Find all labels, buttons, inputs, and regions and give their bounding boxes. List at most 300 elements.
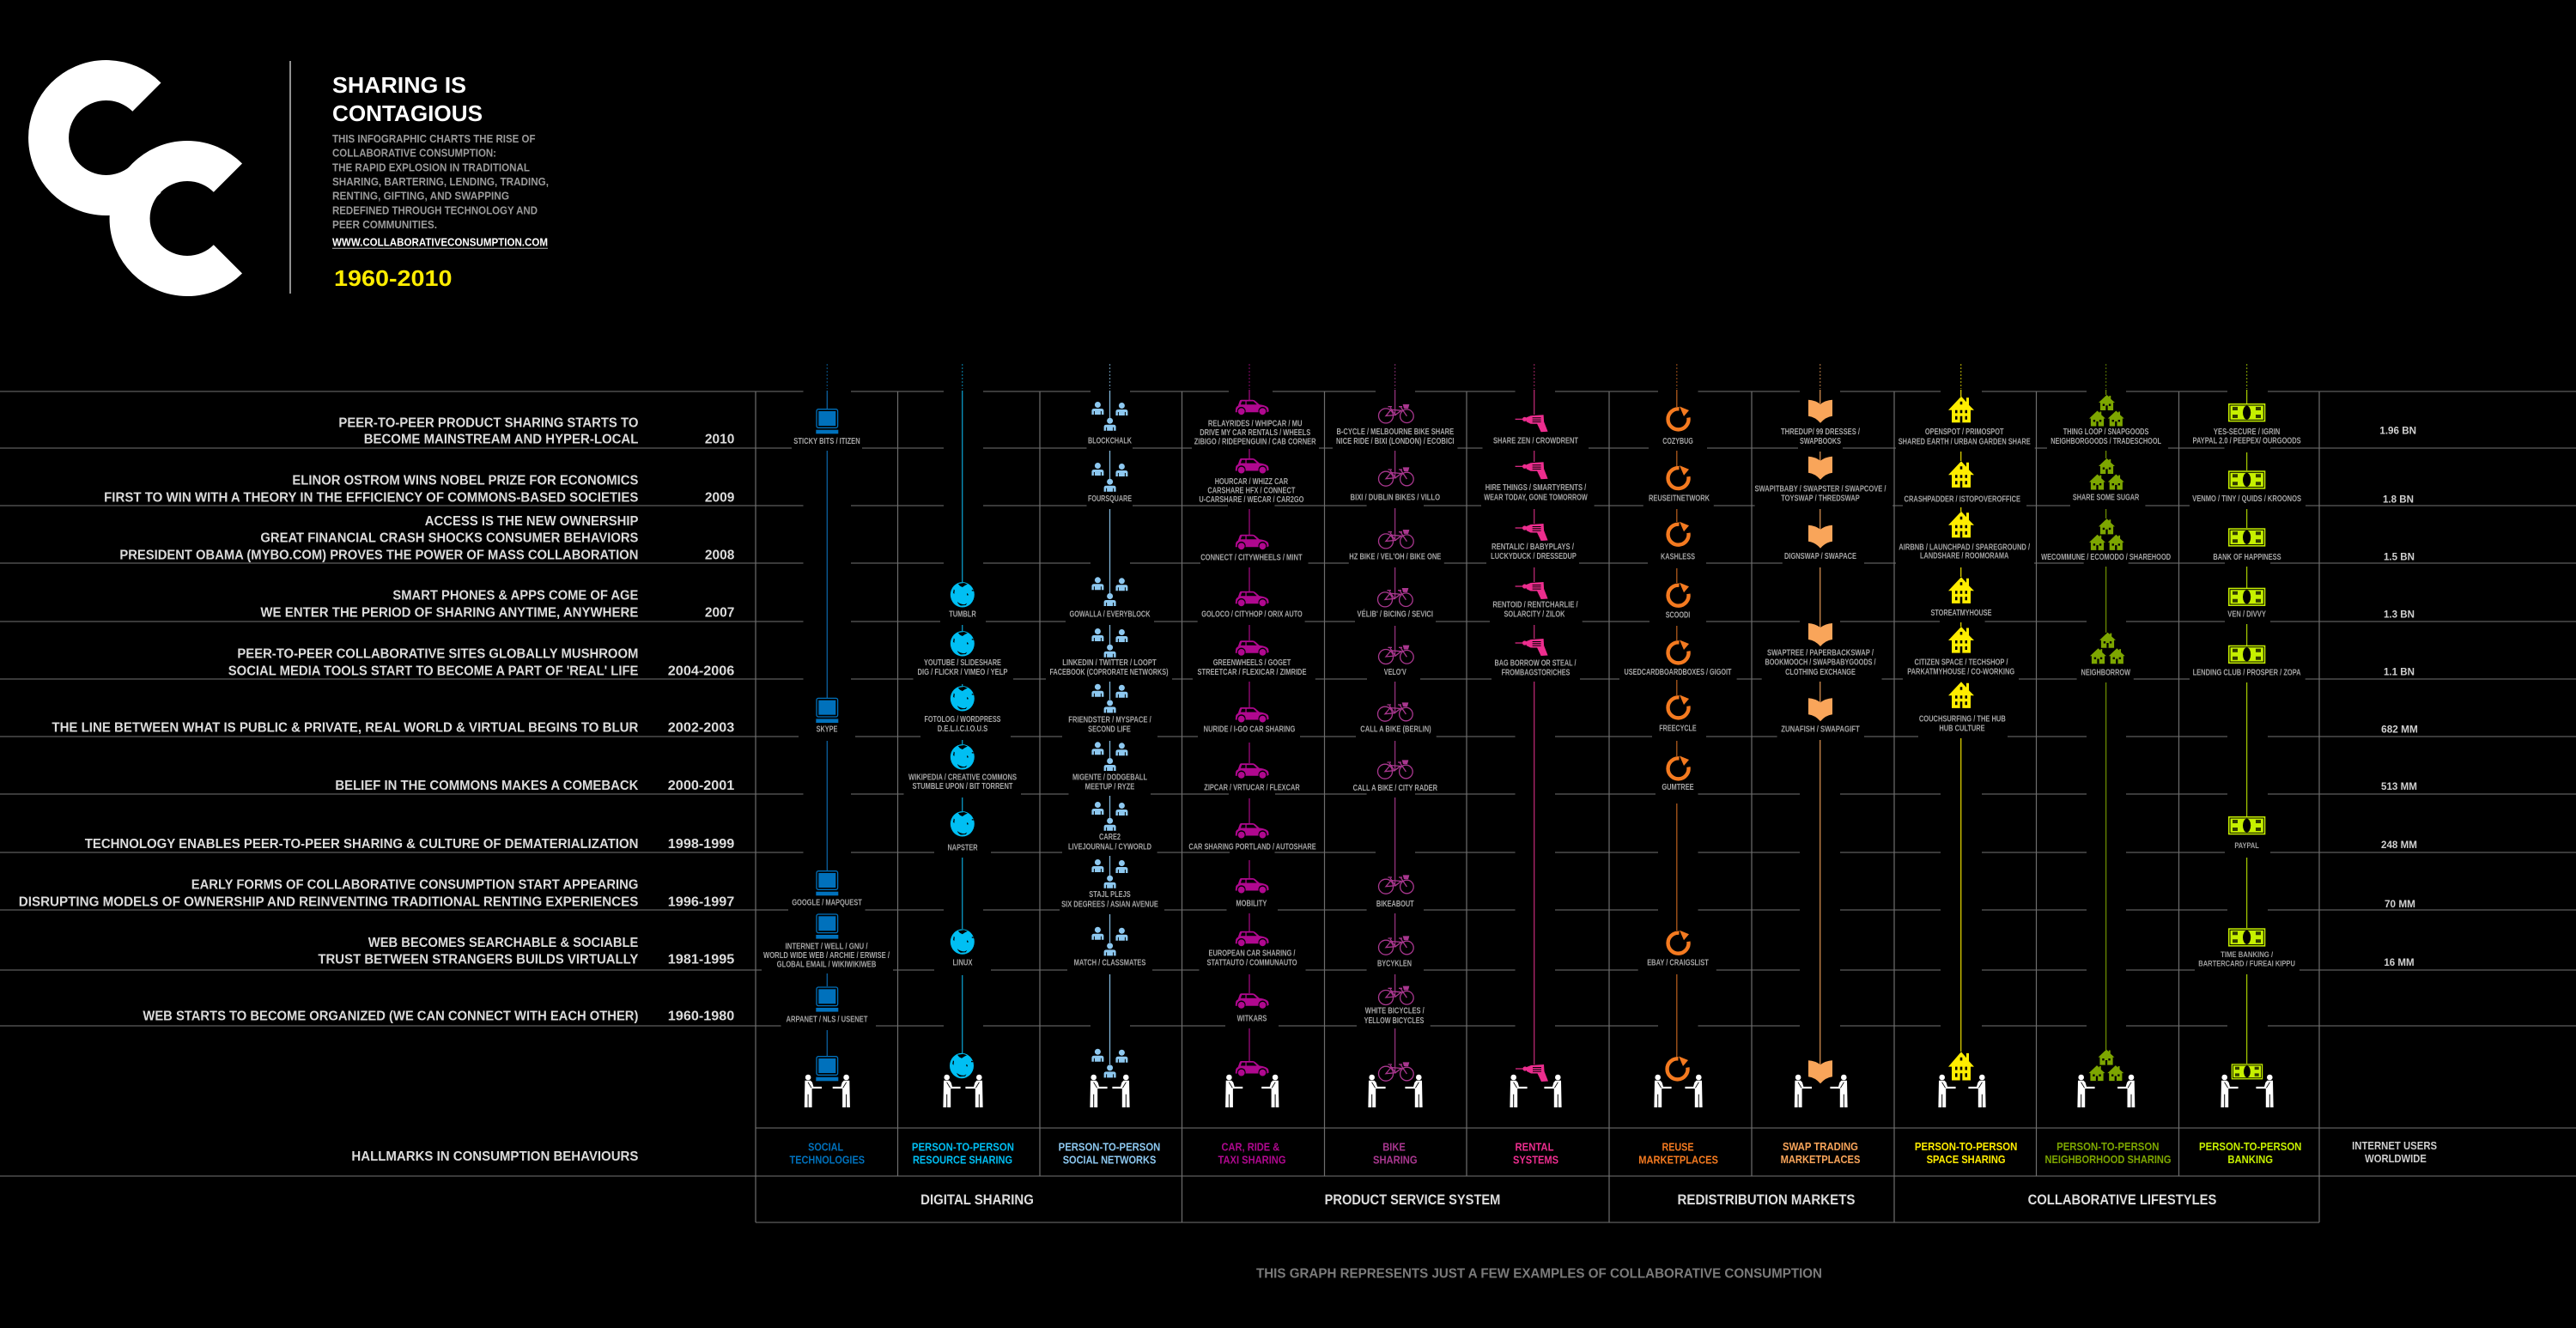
icon: car shared by people bbox=[1225, 1061, 1279, 1107]
group: digital sharing: DIGITAL SHARING bbox=[920, 1192, 1034, 1208]
item: Yes-Secure: PAYPAL 2.0 / PEEPEX/ OURGOODS bbox=[2193, 436, 2301, 446]
item: Internet: WORLD WIDE WEB / ARCHIE / ERWISE / bbox=[763, 951, 890, 961]
timeline events bbox=[19, 415, 734, 1164]
icon: bike shared by people bbox=[1368, 1063, 1423, 1107]
item: Gowalla bbox=[1070, 577, 1151, 619]
event 2007 bbox=[260, 589, 734, 620]
heading: bike sharing: BIKE bbox=[1382, 1141, 1406, 1154]
item: Google: GOOGLE / MAPQUEST bbox=[792, 898, 862, 907]
item: CouchSurfing: HUB CULTURE bbox=[1939, 724, 1985, 733]
item: Match bbox=[1074, 927, 1146, 968]
item: Rentoid bbox=[1492, 582, 1578, 620]
item: Rentalic: RENTALIC / BABYPLAYS / bbox=[1492, 543, 1574, 552]
item: Airbnb: LANDSHARE / ROOMORAMA bbox=[1920, 552, 2008, 561]
footnote: THIS GRAPH REPRESENTS JUST A FEW EXAMPLES OF COLLABORATIVE CONSUMPTION bbox=[1256, 1267, 1822, 1282]
event 2004-2006: 2004-2006 bbox=[668, 664, 734, 679]
item: Hourcar: CARSHARE HFX / CONNECT bbox=[1207, 487, 1295, 496]
event 2008 bbox=[119, 514, 734, 562]
item: Zipcar: ZIPCAR / VRTUCAR / FLEXCAR bbox=[1204, 783, 1300, 792]
date range: 1960-2010 bbox=[334, 267, 452, 291]
item: Connect: CONNECT / CITYWHEELS / MINT bbox=[1200, 553, 1303, 562]
column: internet users worldwide: 513 MM bbox=[2381, 780, 2417, 792]
item: Match: MATCH / CLASSMATES bbox=[1074, 959, 1146, 968]
event 2009: FIRST TO WIN WITH A THEORY IN THE EFFICIENCY OF COMMONS-BASED SOCIETIES bbox=[104, 490, 639, 505]
item: Gumtree: GUMTREE bbox=[1662, 783, 1694, 792]
item: SwapItBaby bbox=[1755, 457, 1886, 503]
event 1981-1995: TRUST BETWEEN STRANGERS BUILDS VIRTUALLY bbox=[318, 953, 639, 967]
intro text: SHARING, BARTERING, LENDING, TRADING, bbox=[332, 175, 549, 188]
item: StoreAtMyHouse: STOREATMYHOUSE bbox=[1930, 609, 1992, 618]
item: Wikipedia bbox=[908, 744, 1017, 791]
item: SwapTree: SWAPTREE / PAPERBACKSWAP / bbox=[1767, 649, 1874, 658]
item: Bycyklen: BYCYKLEN bbox=[1377, 959, 1412, 968]
item: SwapItBaby: TOYSWAP / THREDSWAP bbox=[1781, 494, 1860, 503]
heading: swap trading: MARKETPLACES bbox=[1781, 1153, 1861, 1166]
item: Hourcar bbox=[1199, 458, 1304, 505]
item: Zunafish bbox=[1781, 698, 1860, 735]
item: thredUP bbox=[1781, 400, 1860, 446]
intro text: COLLABORATIVE CONSUMPTION: bbox=[332, 147, 496, 160]
item: eBay: EBAY / CRAIGSLIST bbox=[1647, 958, 1709, 967]
group: product service system: PRODUCT SERVICE SYSTEM bbox=[1325, 1192, 1500, 1208]
item: NuRide bbox=[1204, 707, 1296, 734]
event 1998-1999: 1998-1999 bbox=[668, 837, 734, 852]
item: DigNSwap: DIGNSWAP / SWAPACE bbox=[1784, 552, 1856, 561]
item: HZ Bike bbox=[1349, 531, 1442, 562]
item: Zipcar bbox=[1204, 763, 1300, 792]
intro text: RENTING, GIFTING, AND SWAPPING bbox=[332, 190, 509, 203]
heading: rental systems: SYSTEMS bbox=[1513, 1153, 1558, 1166]
heading: resource sharing bbox=[912, 1141, 1014, 1166]
event 2002-2003: 2002-2003 bbox=[668, 720, 734, 735]
item: Bikeabout: BIKEABOUT bbox=[1376, 900, 1414, 909]
heading: neighborhood sharing bbox=[2045, 1140, 2171, 1166]
column: internet users worldwide: 1.1 BN bbox=[2384, 666, 2415, 678]
item: thredUP: SWAPBOOKS bbox=[1800, 437, 1841, 446]
item: Bixi: BIXI / DUBLIN BIKES / VILLO bbox=[1351, 494, 1440, 503]
heading: internet users bbox=[2352, 1139, 2437, 1165]
event 2002-2003: THE LINE BETWEEN WHAT IS PUBLIC & PRIVATE, REAL WORLD & VIRTUAL BEGINS TO BLUR bbox=[52, 720, 639, 735]
item: YouTube: DIG / FLICKR / VIMEO / YELP bbox=[917, 668, 1008, 677]
heading: social networks: PERSON-TO-PERSON bbox=[1059, 1141, 1160, 1154]
item: Gumtree bbox=[1662, 755, 1694, 792]
item: Skype bbox=[816, 698, 838, 735]
item: Tumblr: TUMBLR bbox=[949, 609, 976, 619]
item: Yes-Secure: YES-SECURE / IGRIN bbox=[2214, 428, 2280, 437]
item: ReuseItNetwork: REUSEITNETWORK bbox=[1649, 494, 1710, 504]
item: Rentoid: RENTOID / RENTCHARLIE / bbox=[1492, 601, 1578, 610]
item: Mobility: MOBILITY bbox=[1236, 900, 1267, 909]
item: GreenWheels: GREENWHEELS / GOGET bbox=[1213, 658, 1291, 668]
item: Freecycle: FREECYCLE bbox=[1659, 725, 1697, 734]
item: Car Sharing Portland bbox=[1188, 823, 1316, 852]
column: internet users worldwide: 1.96 BN bbox=[2379, 425, 2416, 437]
icon: network shared by people bbox=[1090, 1049, 1130, 1107]
heading: bike sharing: SHARING bbox=[1373, 1153, 1418, 1166]
item: WeCommune: WECOMMUNE / ECOMODO / SHAREHOOD bbox=[2041, 553, 2171, 562]
heading: swap trading bbox=[1781, 1140, 1861, 1166]
item: Fotolog: D.E.L.I.C.I.O.U.S bbox=[938, 725, 987, 734]
item: Rentoid: SOLARCITY / ZILOK bbox=[1504, 610, 1565, 620]
item: Fotolog: FOTOLOG / WORDPRESS bbox=[924, 715, 1001, 725]
item: Hire Things: WEAR TODAY, GONE TOMORROW bbox=[1484, 493, 1588, 502]
item: Arpanet: ARPANET / NLS / USENET bbox=[787, 1016, 867, 1025]
item: European Car Sharing: EUROPEAN CAR SHARING / bbox=[1209, 949, 1296, 958]
item: Lending Club: LENDING CLUB / PROSPER / ZOPA bbox=[2193, 669, 2301, 678]
item: Bank of Happiness bbox=[2213, 528, 2281, 562]
item: thredUP: THREDUP/ 99 DRESSES / bbox=[1781, 428, 1860, 437]
event 2010 bbox=[338, 415, 734, 447]
item: Internet: INTERNET / WELL / GNU / bbox=[785, 942, 868, 951]
item: Blockchalk: BLOCKCHALK bbox=[1088, 437, 1133, 446]
event 2004-2006: SOCIAL MEDIA TOOLS START TO BECOME A PART OF 'REAL' LIFE bbox=[228, 664, 639, 679]
column: car sharing bbox=[1188, 364, 1319, 1166]
item: Foursquare bbox=[1088, 463, 1132, 504]
heading: social technologies: TECHNOLOGIES bbox=[790, 1153, 865, 1166]
item: Tumblr bbox=[949, 582, 976, 619]
item: eBay bbox=[1647, 931, 1709, 967]
column: internet users worldwide: 70 MM bbox=[2385, 898, 2415, 910]
item: Friendster: FRIENDSTER / MYSPACE / bbox=[1068, 716, 1151, 725]
event 1960-1980: 1960-1980 bbox=[668, 1009, 734, 1023]
item: OpenSpot bbox=[1899, 397, 2031, 447]
logo: CC bbox=[49, 80, 228, 276]
item: Migente bbox=[1072, 742, 1147, 792]
intro text: PEER COMMUNITIES. bbox=[332, 218, 437, 231]
column: internet users worldwide: 682 MM bbox=[2381, 723, 2418, 735]
item: Witkars bbox=[1236, 993, 1269, 1024]
item: Migente: MEETUP / RYZE bbox=[1085, 783, 1135, 792]
item: Velib: VÉLIB' / BICING / SEVICI bbox=[1358, 608, 1433, 619]
item: PayPal: PAYPAL bbox=[2234, 841, 2259, 850]
item: CozyBug: COZYBUG bbox=[1662, 437, 1693, 446]
event 1998-1999: TECHNOLOGY ENABLES PEER-TO-PEER SHARING & CULTURE OF DEMATERIALIZATION bbox=[85, 837, 638, 852]
item: Wikipedia: STUMBLE UPON / BIT TORRENT bbox=[912, 782, 1013, 791]
heading: car sharing bbox=[1218, 1141, 1286, 1166]
item: UsedCardboardBoxes: USEDCARDBOARDBOXES / GIGOIT bbox=[1625, 668, 1731, 677]
item: Call a Bike Berlin bbox=[1360, 703, 1431, 734]
event 1996-1997 bbox=[19, 878, 734, 909]
item: LinkedIn: LINKEDIN / TWITTER / LOOPT bbox=[1062, 658, 1157, 668]
item: SwapTree: BOOKMOOCH / SWAPBABYGOODS / bbox=[1765, 658, 1876, 668]
icon: computer shared by people bbox=[805, 1057, 850, 1107]
icon: drill shared by people bbox=[1510, 1064, 1562, 1107]
heading: banking: PERSON-TO-PERSON bbox=[2199, 1140, 2301, 1153]
event 2004-2006 bbox=[228, 647, 734, 679]
item: Thing Loop: NEIGHBORGOODS / TRADESCHOOL bbox=[2050, 437, 2161, 446]
item: Velo'v: VELO'V bbox=[1384, 668, 1406, 677]
column: internet users worldwide: 248 MM bbox=[2381, 839, 2417, 851]
heading: car sharing: CAR, RIDE & bbox=[1221, 1141, 1280, 1154]
event 1996-1997: DISRUPTING MODELS OF OWNERSHIP AND REINVENTING TRADITIONAL RENTING EXPERIENCES bbox=[19, 894, 639, 909]
item: Stajl Plejs bbox=[1061, 859, 1158, 909]
item: Citizen Space: PARKATMYHOUSE / CO-WORKING bbox=[1907, 668, 2014, 677]
item: Rentalic: LUCKYDUCK / DRESSEDUP bbox=[1491, 552, 1577, 561]
item: Connect bbox=[1200, 535, 1303, 562]
event 2009 bbox=[104, 474, 734, 505]
item: Wikipedia: WIKIPEDIA / CREATIVE COMMONS bbox=[908, 773, 1017, 783]
item: Time Banking: TIME BANKING / bbox=[2221, 950, 2274, 959]
heading: neighborhood sharing: PERSON-TO-PERSON bbox=[2057, 1140, 2159, 1153]
item: Zunafish: ZUNAFISH / SWAPAGIFT bbox=[1781, 725, 1860, 735]
item: Airbnb: AIRBNB / LAUNCHPAD / SPAREGROUND / bbox=[1899, 543, 2030, 552]
item: SwapItBaby: SWAPITBABY / SWAPSTER / SWAPCOVE / bbox=[1755, 485, 1886, 494]
item: Bag Borrow or Steal: FROMBAGSTORICHES bbox=[1502, 668, 1571, 677]
item: Stajl Plejs: SIX DEGREES / ASIAN AVENUE bbox=[1061, 900, 1158, 909]
heading: internet users: INTERNET USERS bbox=[2352, 1139, 2437, 1152]
column: social networks bbox=[1046, 364, 1172, 1166]
item: Scoodi: SCOODI bbox=[1666, 610, 1690, 620]
item: LinkedIn bbox=[1049, 628, 1168, 677]
event 2010: PEER-TO-PEER PRODUCT SHARING STARTS TO bbox=[338, 415, 638, 430]
event 2000-2001: BELIEF IN THE COMMONS MAKES A COMEBACK bbox=[335, 779, 639, 793]
item: Mobility bbox=[1236, 878, 1269, 909]
item: Airbnb bbox=[1899, 512, 2030, 561]
item: Foursquare: FOURSQUARE bbox=[1088, 494, 1132, 504]
item: ReuseItNetwork bbox=[1649, 465, 1710, 504]
item: CozyBug bbox=[1662, 407, 1693, 446]
column: internet users worldwide: 1.5 BN bbox=[2384, 550, 2415, 562]
item: Ven bbox=[2227, 588, 2266, 619]
item: Venmo bbox=[2192, 470, 2301, 504]
item: Blockchalk bbox=[1088, 402, 1133, 446]
item: White Bicycles: YELLOW BICYCLES bbox=[1364, 1016, 1425, 1026]
item: DigNSwap bbox=[1784, 525, 1856, 561]
column: rental systems bbox=[1481, 364, 1595, 1166]
category groups bbox=[920, 1192, 2216, 1208]
item: B-Cycle bbox=[1336, 405, 1455, 446]
event 2008: ACCESS IS THE NEW OWNERSHIP bbox=[425, 514, 639, 529]
column: resource sharing bbox=[903, 364, 1021, 1166]
item: YouTube: YOUTUBE / SLIDESHARE bbox=[924, 658, 1001, 668]
event 1996-1997: 1996-1997 bbox=[668, 894, 734, 909]
icon: neighborhood shared by people bbox=[2077, 1050, 2135, 1107]
item: Linux: LINUX bbox=[953, 959, 973, 968]
intro text: REDEFINED THROUGH TECHNOLOGY AND bbox=[332, 203, 538, 216]
item: Linux bbox=[951, 929, 975, 968]
event 2008: 2008 bbox=[705, 548, 734, 562]
column: space sharing bbox=[1896, 364, 2035, 1166]
item: Care2 bbox=[1068, 802, 1151, 852]
item: Bixi bbox=[1351, 468, 1440, 503]
item: Friendster: SECOND LIFE bbox=[1088, 725, 1131, 735]
item: Witkars: WITKARS bbox=[1237, 1015, 1267, 1024]
heading: reuse marketplaces: REUSE bbox=[1662, 1141, 1694, 1154]
item: Migente: MIGENTE / DODGEBALL bbox=[1072, 773, 1147, 783]
title bbox=[332, 74, 483, 126]
item: Bag Borrow or Steal: BAG BORROW OR STEAL / bbox=[1494, 658, 1577, 668]
heading: space sharing: SPACE SHARING bbox=[1927, 1153, 2006, 1166]
heading: reuse marketplaces: MARKETPLACES bbox=[1638, 1153, 1718, 1166]
column: bike sharing bbox=[1333, 364, 1457, 1166]
item: Napster: NAPSTER bbox=[948, 844, 978, 853]
heading: internet users: WORLDWIDE bbox=[2365, 1152, 2427, 1165]
event 2010: 2010 bbox=[705, 433, 734, 447]
event 2004-2006: PEER-TO-PEER COLLABORATIVE SITES GLOBALLY MUSHROOM bbox=[237, 647, 638, 662]
item: Citizen Space: CITIZEN SPACE / TECHSHOP / bbox=[1915, 658, 2008, 668]
item: Call a Bike City Rader bbox=[1353, 761, 1438, 793]
event 2007: 2007 bbox=[705, 605, 734, 620]
heading: reuse marketplaces bbox=[1638, 1141, 1718, 1166]
item: Scoodi bbox=[1666, 583, 1690, 620]
event 2009: 2009 bbox=[705, 490, 734, 505]
item: White Bicycles: WHITE BICYCLES / bbox=[1365, 1007, 1425, 1016]
title: SHARING IS bbox=[332, 74, 466, 98]
item: Share Zen: SHARE ZEN / CROWDRENT bbox=[1493, 437, 1578, 446]
item: Fotolog bbox=[924, 686, 1001, 734]
item: Care2: LIVEJOURNAL / CYWORLD bbox=[1068, 842, 1151, 852]
item: B-Cycle: NICE RIDE / BIXI (LONDON) / ECOBICI bbox=[1336, 437, 1455, 446]
heading: banking bbox=[2199, 1140, 2301, 1166]
heading: social networks bbox=[1059, 1141, 1160, 1166]
item: RelayRides: DRIVE MY CAR RENTALS / WHEELS bbox=[1200, 428, 1310, 438]
item: Crashpadder: CRASHPADDER / ISTOPOVEROFFICE bbox=[1905, 495, 2020, 505]
item: Time Banking: BARTERCARD / FUREAI KIPPU bbox=[2198, 959, 2295, 967]
heading: social technologies bbox=[790, 1141, 865, 1166]
heading: neighborhood sharing: NEIGHBORHOOD SHARING bbox=[2045, 1153, 2171, 1166]
item: GoLoco: GOLOCO / CITYHOP / ORIX AUTO bbox=[1201, 609, 1303, 619]
column: swap trading bbox=[1755, 364, 1893, 1166]
heading: rental systems: RENTAL bbox=[1515, 1141, 1554, 1154]
item: Car Sharing Portland: CAR SHARING PORTLAND / AUTOSHARE bbox=[1188, 843, 1316, 852]
event 2008: GREAT FINANCIAL CRASH SHOCKS CONSUMER BEHAVIORS bbox=[260, 531, 639, 546]
item: Citizen Space bbox=[1907, 627, 2014, 677]
item: GreenWheels bbox=[1197, 640, 1307, 677]
event 1981-1995: WEB BECOMES SEARCHABLE & SOCIABLE bbox=[368, 936, 639, 950]
item: GoLoco bbox=[1201, 591, 1303, 619]
group: collaborative lifestyles: COLLABORATIVE LIFESTYLES bbox=[2028, 1192, 2216, 1208]
item: PayPal bbox=[2228, 816, 2265, 850]
item: Yes-Secure bbox=[2193, 403, 2301, 446]
item: Kashless: KASHLESS bbox=[1661, 553, 1695, 562]
event 2010: BECOME MAINSTREAM AND HYPER-LOCAL bbox=[364, 433, 639, 447]
item: Skype: SKYPE bbox=[817, 725, 838, 735]
item: Call a Bike City Rader: CALL A BIKE / CITY RADER bbox=[1353, 784, 1438, 793]
item: YouTube bbox=[917, 631, 1008, 677]
item: Ven: VEN / DIVVY bbox=[2227, 609, 2266, 619]
item: Bag Borrow or Steal bbox=[1494, 639, 1577, 677]
item: Sticky Bits: STICKY BITS / ITIZEN bbox=[793, 437, 860, 446]
item: Stajl Plejs: STAJL PLEJS bbox=[1089, 890, 1131, 900]
icon: banknote shared by people bbox=[2221, 1064, 2274, 1107]
heading: banking: BANKING bbox=[2227, 1153, 2273, 1166]
intro text: THE RAPID EXPLOSION IN TRADITIONAL bbox=[332, 161, 530, 173]
event 1981-1995: 1981-1995 bbox=[668, 953, 734, 967]
heading: resource sharing: RESOURCE SHARING bbox=[913, 1153, 1012, 1166]
item: Crashpadder bbox=[1905, 461, 2020, 505]
item: Rentalic bbox=[1491, 524, 1577, 561]
item: Bank of Happiness: BANK OF HAPPINESS bbox=[2213, 553, 2281, 562]
event 1960-1980: WEB STARTS TO BECOME ORGANIZED (WE CAN CONNECT WITH EACH OTHER) bbox=[143, 1009, 638, 1023]
column: banking bbox=[2190, 364, 2306, 1166]
column: neighborhood sharing bbox=[2041, 364, 2171, 1166]
heading: bike sharing bbox=[1373, 1141, 1418, 1166]
group: redistribution markets: REDISTRIBUTION MARKETS bbox=[1678, 1192, 1855, 1208]
item: OpenSpot: OPENSPOT / PRIMOSPOT bbox=[1925, 428, 2004, 437]
event 2007: WE ENTER THE PERIOD OF SHARING ANYTIME, ANYWHERE bbox=[260, 605, 639, 620]
item: CouchSurfing bbox=[1919, 682, 2006, 733]
item: HZ Bike: HZ BIKE / VEL'OH / BIKE ONE bbox=[1349, 553, 1442, 562]
item: StoreAtMyHouse bbox=[1930, 577, 1992, 618]
column: internet users worldwide: 1.8 BN bbox=[2383, 493, 2414, 505]
event 1996-1997: EARLY FORMS OF COLLABORATIVE CONSUMPTION START APPEARING bbox=[191, 878, 638, 893]
heading: space sharing: PERSON-TO-PERSON bbox=[1915, 1140, 2017, 1153]
event 2007: SMART PHONES & APPS COME OF AGE bbox=[392, 589, 639, 603]
item: Friendster bbox=[1068, 684, 1151, 735]
item: SwapTree: CLOTHING EXCHANGE bbox=[1785, 668, 1856, 677]
item: Gowalla: GOWALLA / EVERYBLOCK bbox=[1070, 609, 1151, 619]
item: Bycyklen bbox=[1377, 937, 1413, 968]
column: reuse marketplaces bbox=[1619, 364, 1737, 1166]
intro text: THIS INFOGRAPHIC CHARTS THE RISE OF bbox=[332, 132, 536, 145]
item: Arpanet bbox=[787, 987, 867, 1025]
item: LinkedIn: FACEBOOK (COPRORATE NETWORKS) bbox=[1049, 668, 1168, 677]
event 2000-2001: 2000-2001 bbox=[668, 779, 734, 793]
item: Velib bbox=[1358, 589, 1433, 619]
title: CONTAGIOUS bbox=[332, 102, 483, 126]
item: Hourcar: U-CARSHARE / WECAR / CAR2GO bbox=[1199, 495, 1304, 505]
column: internet users worldwide: 1.3 BN bbox=[2384, 608, 2415, 620]
website link: WWW.COLLABORATIVECONSUMPTION.COM bbox=[332, 236, 548, 249]
item: Freecycle bbox=[1659, 695, 1697, 734]
item: RelayRides bbox=[1194, 400, 1316, 447]
item: RelayRides: RELAYRIDES / WHIPCAR / MU bbox=[1208, 420, 1303, 429]
item: Thing Loop: THING LOOP / SNAPGOODS bbox=[2063, 428, 2149, 437]
item: Time Banking bbox=[2198, 928, 2295, 967]
item: European Car Sharing: STATTAUTO / COMMUNAUTO bbox=[1207, 958, 1297, 967]
column: internet users worldwide bbox=[2352, 425, 2437, 1165]
item: Google bbox=[792, 871, 862, 907]
item: Call a Bike Berlin: CALL A BIKE (BERLIN) bbox=[1360, 725, 1431, 734]
item: Share Zen bbox=[1493, 415, 1578, 446]
item: Velo'v bbox=[1379, 646, 1413, 677]
item: Hire Things: HIRE THINGS / SMARTYRENTS / bbox=[1485, 483, 1586, 493]
item: Thing Loop bbox=[2050, 395, 2161, 446]
icon: house shared by people bbox=[1938, 1052, 1986, 1107]
item: Sticky Bits bbox=[793, 409, 860, 446]
item: Share Some Sugar: SHARE SOME SUGAR bbox=[2073, 494, 2140, 503]
heading: resource sharing: PERSON-TO-PERSON bbox=[912, 1141, 1014, 1154]
item: Hire Things bbox=[1484, 462, 1588, 502]
item: CouchSurfing: COUCHSURFING / THE HUB bbox=[1919, 715, 2006, 725]
heading: social networks: SOCIAL NETWORKS bbox=[1063, 1153, 1156, 1166]
item: B-Cycle: B-CYCLE / MELBOURNE BIKE SHARE bbox=[1336, 428, 1454, 437]
item: Kashless bbox=[1661, 522, 1695, 562]
heading: swap trading: SWAP TRADING bbox=[1783, 1140, 1858, 1153]
item: NuRide: NURIDE / I-GO CAR SHARING bbox=[1204, 725, 1296, 734]
item: Bikeabout bbox=[1376, 876, 1414, 909]
item: UsedCardboardBoxes bbox=[1625, 640, 1731, 677]
event 2009: ELINOR OSTROM WINS NOBEL PRIZE FOR ECONOMICS bbox=[292, 474, 639, 488]
item: Napster bbox=[948, 811, 978, 853]
heading: space sharing bbox=[1915, 1140, 2017, 1166]
item: Care2: CARE2 bbox=[1099, 833, 1121, 842]
item: White Bicycles bbox=[1364, 986, 1425, 1026]
item: Internet bbox=[763, 914, 890, 969]
heading: rental systems bbox=[1513, 1141, 1558, 1166]
item: European Car Sharing bbox=[1207, 931, 1297, 967]
event 2008: PRESIDENT OBAMA (MYBO.COM) PROVES THE POWER OF MASS COLLABORATION bbox=[119, 548, 638, 562]
intro text bbox=[332, 132, 549, 231]
heading: social technologies: SOCIAL bbox=[808, 1141, 843, 1154]
icon: book shared by people bbox=[1795, 1060, 1848, 1107]
item: Hourcar: HOURCAR / WHIZZ CAR bbox=[1215, 477, 1289, 487]
heading: car sharing: TAXI SHARING bbox=[1218, 1153, 1286, 1166]
item: OpenSpot: SHARED EARTH / URBAN GARDEN SHARE bbox=[1899, 438, 2031, 447]
item: Neighborrow bbox=[2081, 633, 2130, 678]
column: social technologies bbox=[762, 364, 893, 1166]
hallmarks label: HALLMARKS IN CONSUMPTION BEHAVIOURS bbox=[351, 1149, 639, 1164]
